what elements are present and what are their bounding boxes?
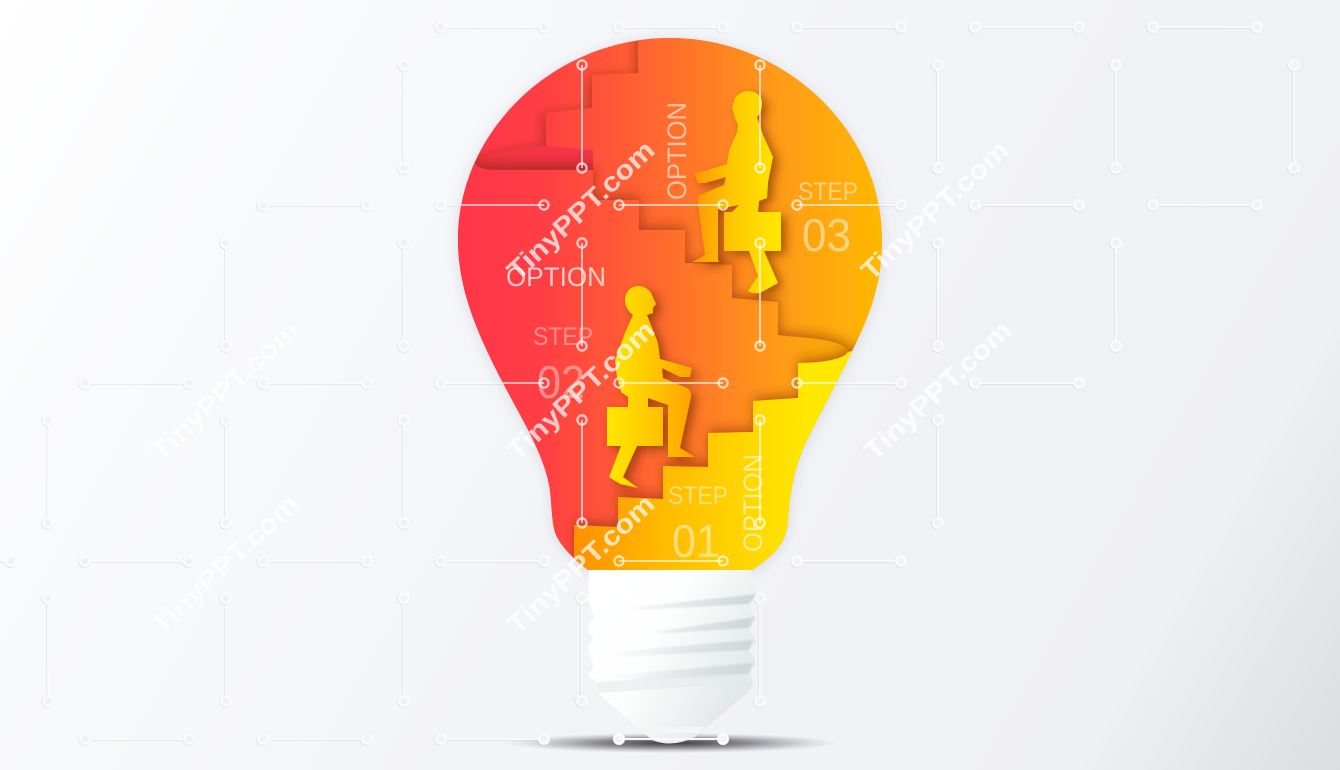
step 01 label <box>668 482 728 567</box>
watermarks: TinyPPT.com <box>501 135 661 286</box>
watermarks: TinyPPT.com <box>145 315 305 466</box>
watermarks: TinyPPT.com <box>855 135 1015 286</box>
step 02 label: 02 <box>537 356 585 408</box>
watermarks: TinyPPT.com <box>145 489 305 640</box>
floor shadow <box>507 733 837 753</box>
step 03 label: 03 <box>802 209 851 261</box>
middle staircase layer <box>458 155 854 570</box>
right curled paper <box>778 335 848 363</box>
watermarks: TinyPPT.com <box>858 315 1018 466</box>
lower yellow staircase <box>568 338 858 570</box>
step 01 label: 01 <box>672 515 720 567</box>
step 02 label: STEP <box>533 323 593 351</box>
figure: upper businessman climbing <box>692 91 781 293</box>
upper curled paper <box>475 146 593 171</box>
watermarks: TinyPPT.com <box>501 489 661 640</box>
option label vertical upper: OPTION <box>662 102 692 200</box>
figure: lower businessman climbing <box>607 286 695 488</box>
option label horizontal: OPTION <box>506 262 606 292</box>
watermarks: TinyPPT.com <box>501 315 661 466</box>
watermarks <box>145 135 1018 640</box>
step 03 label: STEP <box>798 178 858 206</box>
circuit grid overlay on bulb <box>441 65 901 739</box>
light bulb glass <box>454 36 885 574</box>
option label vertical lower: OPTION <box>738 454 768 552</box>
step 02 label <box>533 323 593 408</box>
lamp screw base <box>588 570 756 744</box>
step 01 label: STEP <box>668 482 728 510</box>
upper staircase layer <box>475 30 900 400</box>
step 03 label <box>798 178 858 261</box>
